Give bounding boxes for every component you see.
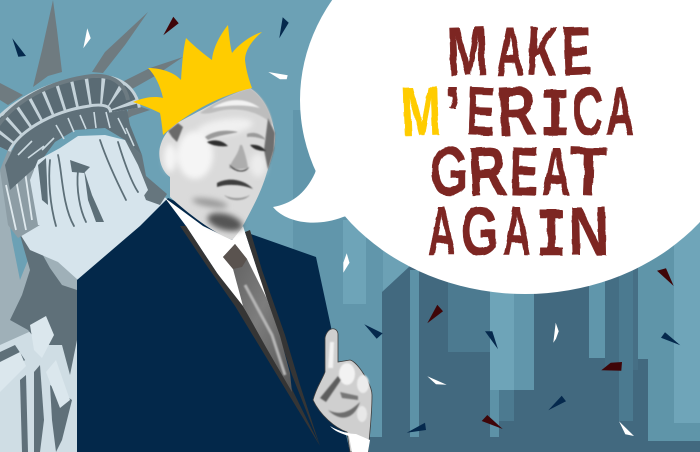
line: MAKE: E bbox=[561, 12, 592, 90]
line: GREAT: E bbox=[509, 133, 540, 210]
line: AGAIN: G bbox=[461, 193, 498, 270]
line: M'ERICA: M bbox=[400, 72, 442, 151]
eyes and brows bbox=[205, 131, 266, 169]
robe and body bbox=[0, 170, 78, 452]
line: GREAT: A bbox=[542, 133, 570, 210]
veil and locks bbox=[0, 150, 45, 238]
crown band bbox=[0, 91, 125, 145]
statue of liberty facepalming bbox=[0, 0, 183, 452]
line: M'ERICA: ’ bbox=[445, 73, 461, 150]
crown bbox=[133, 25, 262, 135]
line: MAKE: K bbox=[525, 12, 560, 91]
line: M'ERICA: C bbox=[573, 73, 603, 150]
line: AGAIN: I bbox=[536, 198, 566, 276]
crown spikes bbox=[0, 0, 183, 120]
line: GREAT bbox=[430, 132, 608, 211]
suit jacket bbox=[77, 198, 350, 452]
line: M'ERICA: I bbox=[540, 78, 570, 156]
shirt collar bbox=[165, 198, 286, 345]
hair bbox=[168, 88, 275, 170]
line: GREAT: T bbox=[569, 132, 608, 211]
line: GREAT: R bbox=[466, 132, 508, 211]
line: MAKE: A bbox=[496, 13, 524, 90]
raised hand bbox=[313, 329, 372, 452]
hands over face bbox=[30, 135, 148, 226]
nose and mouth bbox=[217, 164, 253, 200]
head bbox=[159, 88, 275, 240]
line: M'ERICA: E bbox=[466, 73, 496, 150]
shoulder and arm bbox=[15, 170, 168, 280]
line: AGAIN: N bbox=[568, 193, 610, 270]
necktie bbox=[223, 244, 292, 392]
headline: MAKE M'ERICA GREAT AGAIN bbox=[400, 12, 634, 276]
city skyline bbox=[293, 110, 700, 452]
facial shading bbox=[164, 115, 266, 234]
speech bubble bbox=[273, 0, 700, 294]
line: AGAIN: A bbox=[503, 193, 531, 270]
line: M'ERICA: A bbox=[606, 73, 634, 150]
line: MAKE: M bbox=[446, 12, 489, 91]
line: M'ERICA: R bbox=[495, 72, 538, 151]
hair bbox=[5, 100, 142, 190]
line: AGAIN: A bbox=[428, 193, 456, 270]
lapel shadow bbox=[180, 226, 320, 446]
line: MAKE bbox=[446, 12, 592, 91]
line: GREAT: G bbox=[430, 133, 468, 210]
line: M'ERICA bbox=[400, 72, 634, 156]
line: AGAIN bbox=[428, 193, 610, 276]
